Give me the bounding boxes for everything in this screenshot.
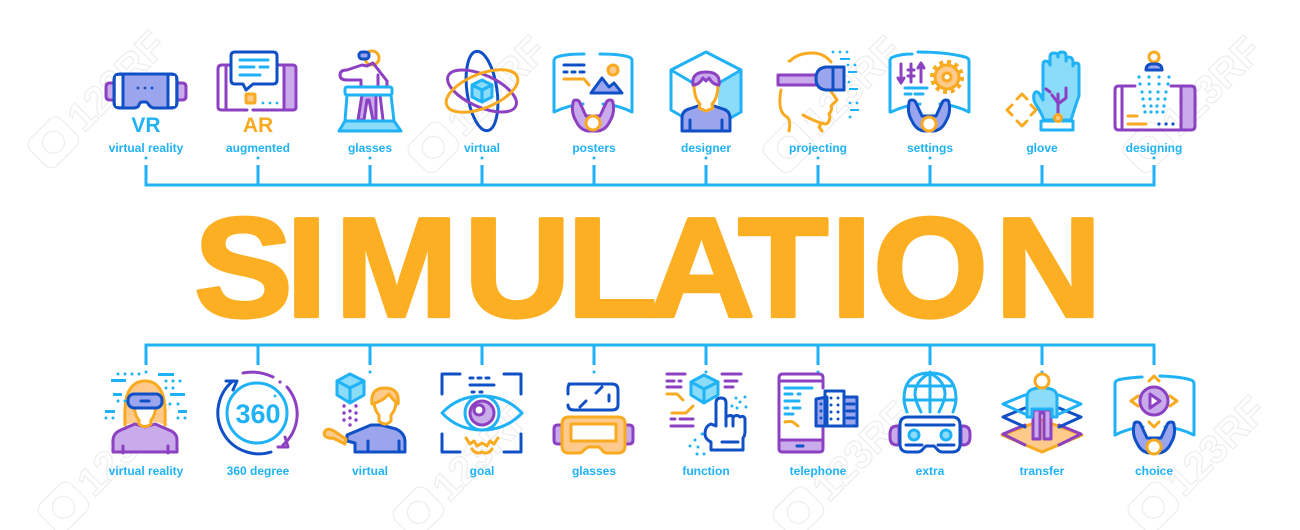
AR text: AR <box>243 114 273 137</box>
icon: layered transfer <box>1002 374 1082 452</box>
label: goal <box>470 464 494 478</box>
icon: VR headset <box>106 74 186 137</box>
label: posters <box>572 141 616 155</box>
label: settings <box>907 141 953 155</box>
label: glasses <box>348 141 392 155</box>
bottom connector <box>144 345 1154 374</box>
label: glasses <box>572 464 616 478</box>
watermarks: 123RF <box>59 23 175 139</box>
label: virtual reality <box>109 141 184 155</box>
label: choice <box>1135 464 1173 478</box>
label: designing <box>1126 141 1182 155</box>
label: designer <box>681 141 731 155</box>
icon: glove <box>1007 52 1079 130</box>
icon: globe with headset <box>890 373 970 452</box>
icon: VR glasses <box>554 384 633 453</box>
label: glove <box>1026 141 1058 155</box>
icon: function hand <box>667 374 748 456</box>
watermarks: 123RF <box>424 393 540 509</box>
icon: designer in cube <box>671 52 741 131</box>
icon: poster screen <box>554 54 632 131</box>
label: function <box>682 464 730 478</box>
watermarks: 123RF <box>1154 28 1270 144</box>
icon: AR phone <box>218 52 296 137</box>
icon: choice screen <box>1115 376 1194 454</box>
label: 360 degree <box>227 464 290 478</box>
watermarks: 123RF <box>804 393 920 509</box>
label: augmented <box>226 141 290 155</box>
icon: person with cube <box>324 374 405 452</box>
icon: woman with VR <box>104 372 187 453</box>
icon: settings screen <box>890 52 969 131</box>
icon: 360 degree: 360 <box>235 399 281 429</box>
icon: eye target <box>442 374 522 453</box>
icon: telephone and buildings <box>779 374 857 453</box>
VR text: VR <box>131 114 161 137</box>
label: transfer <box>1020 464 1065 478</box>
label: virtual <box>464 141 500 155</box>
icon: head with goggles <box>778 51 859 131</box>
watermarks: 123RF <box>794 28 910 144</box>
icon: 360 degree <box>218 372 297 454</box>
label: projecting <box>789 141 847 155</box>
label: virtual reality <box>109 464 184 478</box>
label: virtual <box>352 464 388 478</box>
icon: designing phone <box>1115 52 1195 130</box>
icon: atom <box>440 49 524 133</box>
icon: treadmill person <box>339 51 401 131</box>
label: extra <box>916 464 945 478</box>
watermarks: 123RF <box>439 28 555 144</box>
watermarks: 123RF <box>1159 388 1275 504</box>
top connector <box>144 156 1156 185</box>
watermarks: 123RF <box>69 388 185 504</box>
label: telephone <box>790 464 847 478</box>
title: SIMULATION <box>194 188 1102 347</box>
